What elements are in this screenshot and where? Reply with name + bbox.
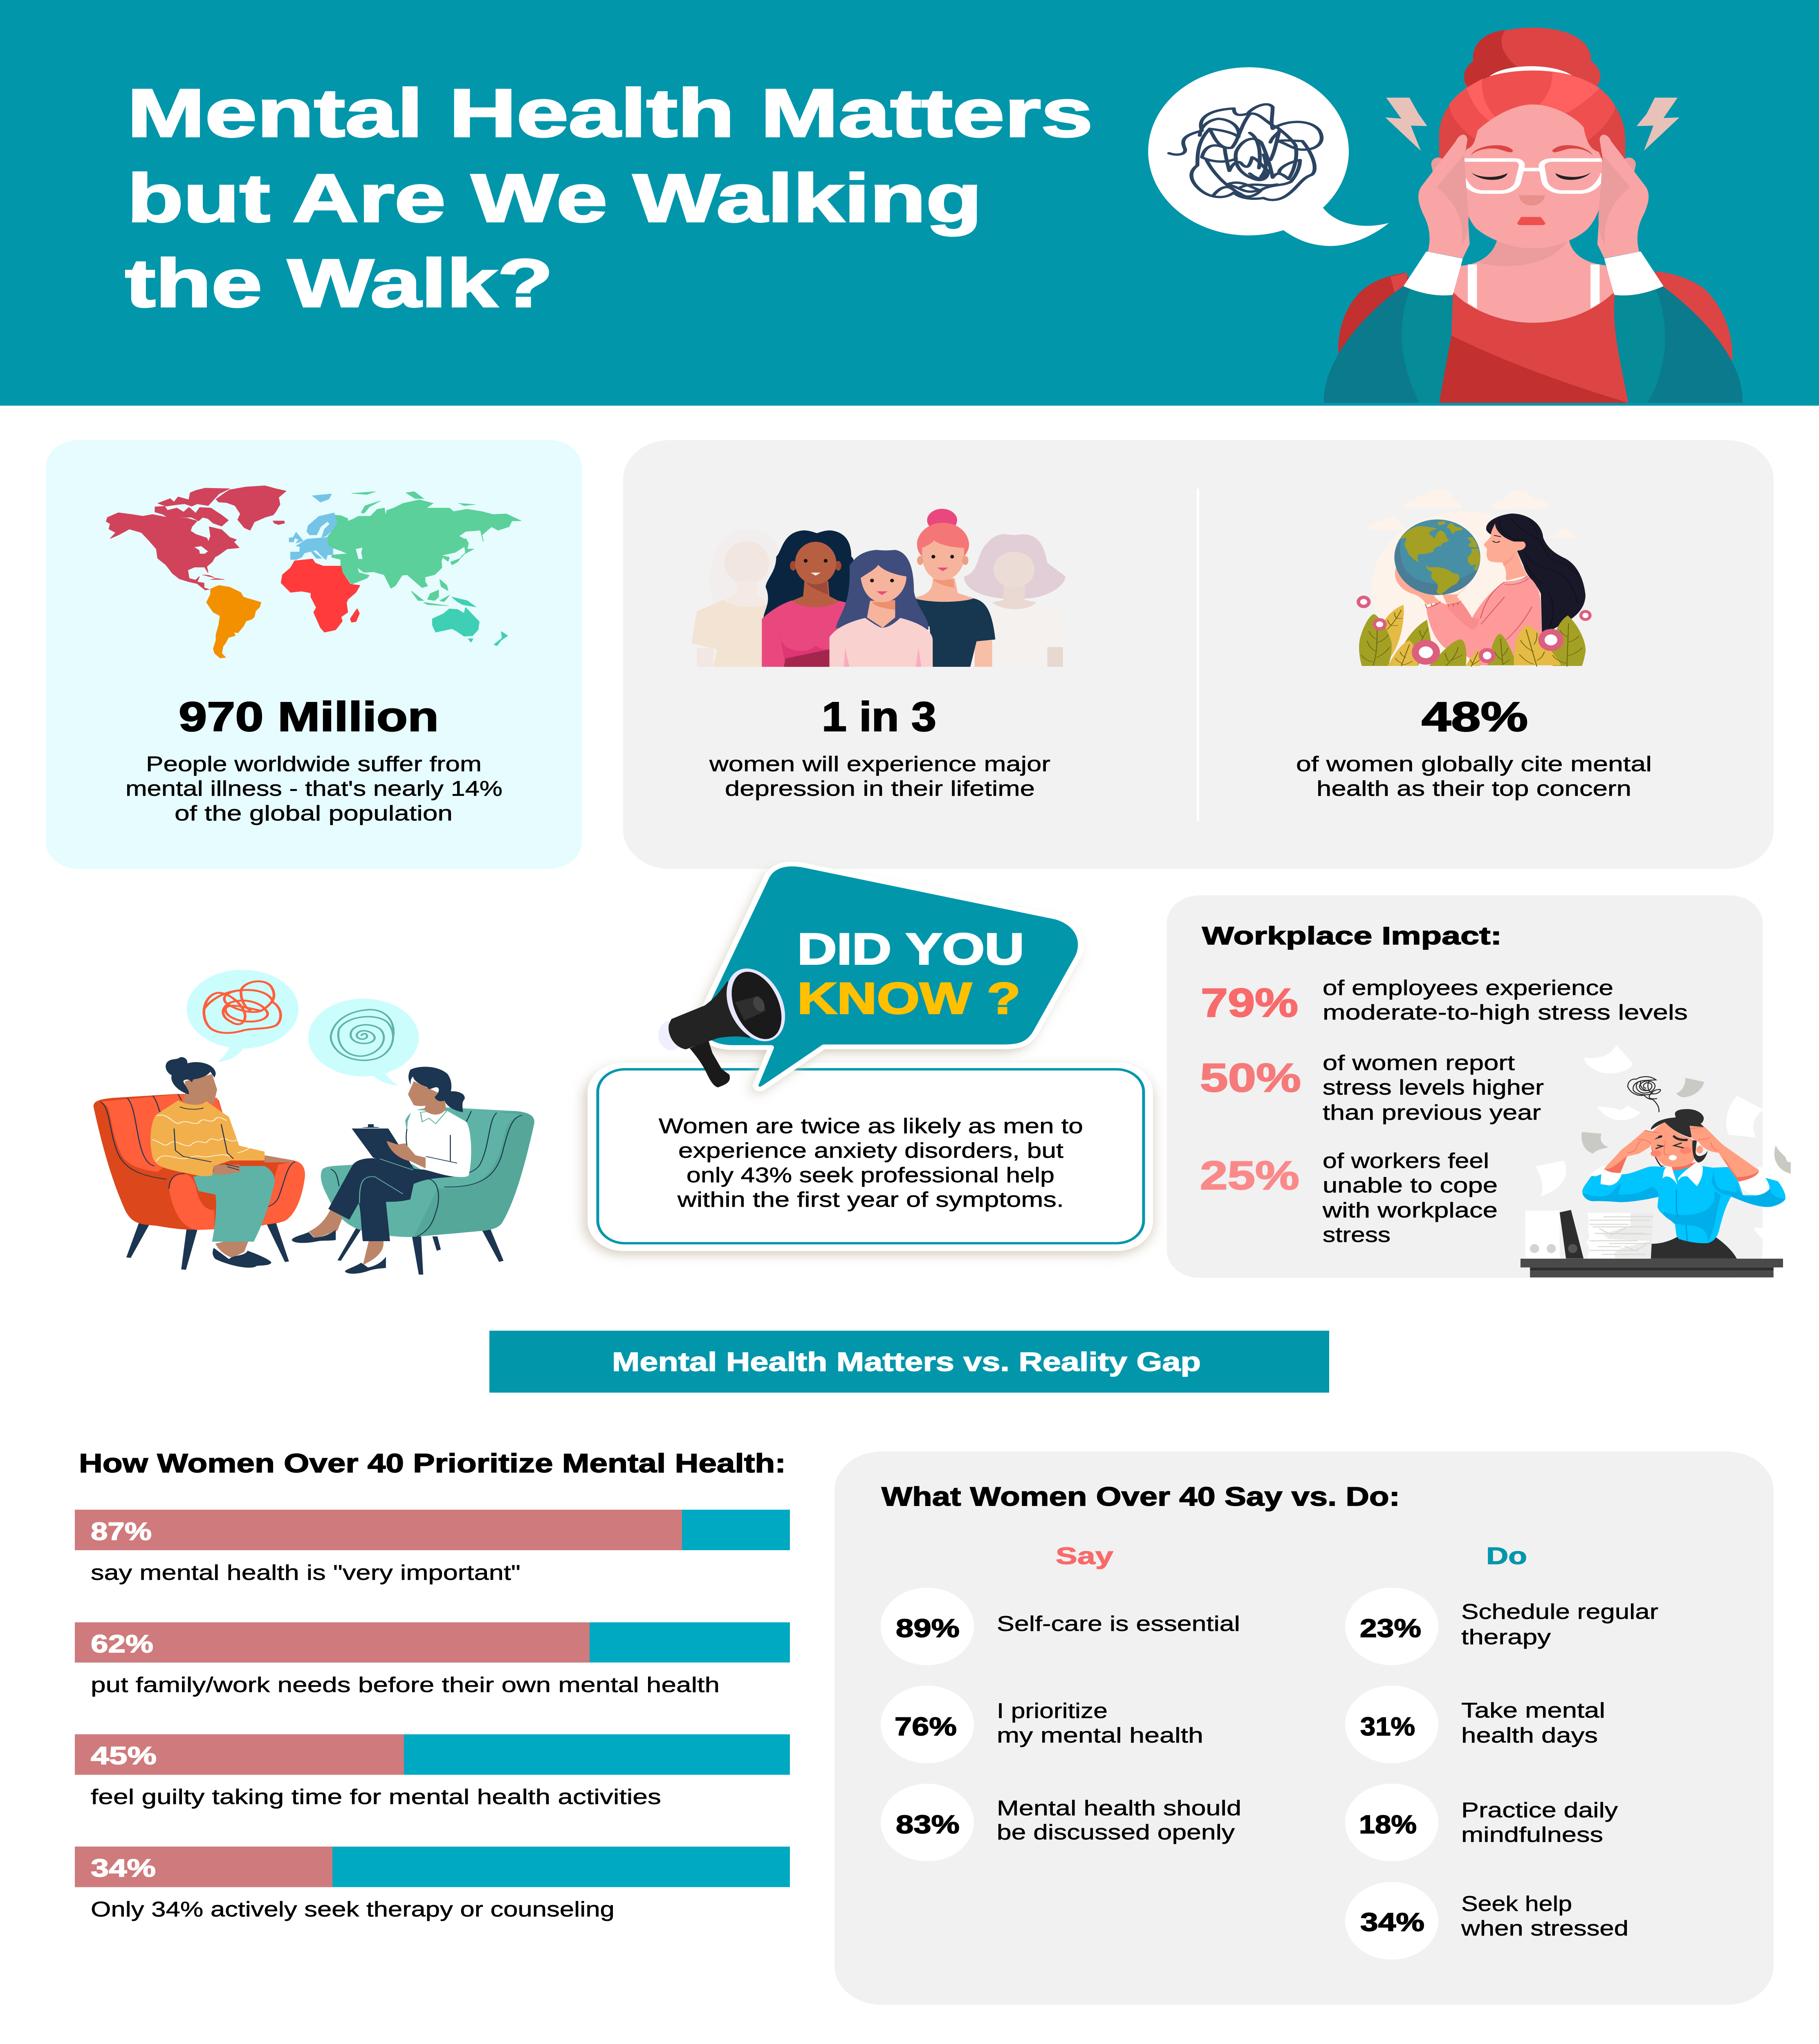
stat: 25% workers [1200, 1149, 1498, 1247]
say item: 76%: I prioritize [997, 1699, 1108, 1723]
figure: woman in pink [762, 530, 856, 667]
stat: 25% workers: of workers feel [1323, 1149, 1489, 1173]
say item: 89%: 89% [896, 1614, 960, 1643]
figure: woman with orange hair [904, 509, 995, 667]
stat: 50% women: stress levels higher [1323, 1076, 1544, 1099]
illustration: group of women [692, 509, 1065, 667]
stat: 25% workers: unable to cope [1323, 1174, 1498, 1197]
figure: face and sweater [1425, 523, 1542, 665]
figure: hair [1439, 28, 1625, 190]
callout text box [584, 1062, 1153, 1255]
section banner: reality gap: Mental Health Matters vs. Reality Gap [612, 1347, 1201, 1377]
icon: paper stack [1587, 1213, 1654, 1258]
stat: 79% employees: 79% [1201, 981, 1298, 1025]
do item: 34%: 34% [1360, 1908, 1424, 1936]
do item: 23%: therapy [1461, 1625, 1551, 1649]
stat: 50% women: 50% [1200, 1056, 1301, 1100]
do item: 18%: Practice daily [1461, 1798, 1618, 1822]
stat: 25% workers: with workplace [1322, 1199, 1498, 1222]
icon: desk [1521, 1259, 1783, 1278]
speech bubble heading [691, 864, 1081, 1094]
bar: 87% [75, 1510, 790, 1585]
do item: 31%: health days [1461, 1724, 1598, 1747]
figure: hands [1395, 567, 1467, 605]
do item: 18% [1345, 1784, 1618, 1861]
bar: 62%: 62% [91, 1630, 153, 1658]
do item: 18%: mindfulness [1461, 1823, 1603, 1847]
title [125, 75, 1093, 321]
stat: 25% workers: stress [1323, 1223, 1391, 1247]
illustration: stressed office worker at desk [1521, 1045, 1791, 1278]
column heading: say: Say [1056, 1543, 1113, 1569]
figure: shoulders, top and cardigan [1324, 240, 1743, 403]
figure: left faded woman [692, 530, 780, 667]
icon: lightning bolts [1385, 98, 1680, 151]
bar: 87%: 87% [91, 1518, 152, 1546]
stat description: mental illness - that's nearly 14% [126, 777, 502, 800]
do item: 18%: 18% [1359, 1810, 1417, 1839]
speech bubble heading: DID YOU [797, 925, 1024, 974]
bar: 62% [75, 1623, 790, 1697]
icon: clouds and backdrop [1366, 489, 1577, 666]
illustration: therapy session [93, 970, 534, 1275]
stat: 970 Million: 970 Million [179, 693, 439, 740]
do item: 23%: 23% [1360, 1614, 1421, 1643]
icon: thought bubble with scribble [1148, 67, 1389, 246]
stat: 79% employees: of employees experience [1323, 976, 1613, 1000]
stat description: People worldwide suffer from [146, 752, 482, 776]
panel: say vs do [834, 1452, 1774, 2005]
bar: 45%: feel guilty taking time for mental health activities [91, 1785, 661, 1809]
stat: 50% women: than previous year [1323, 1101, 1541, 1125]
stat description: depression [709, 752, 1050, 800]
figure: worker with papers and desk [1521, 1077, 1791, 1278]
figure: hands and cuffs [1404, 134, 1664, 296]
bar: 34% [75, 1847, 790, 1921]
bar: 34%: Only 34% actively seek therapy or counseling [91, 1898, 615, 1921]
say item: 89% [881, 1588, 1240, 1665]
figure: therapist on green chair [292, 1067, 534, 1275]
figure: worker arms [1604, 1126, 1759, 1181]
say item: 83%: Mental health should [997, 1796, 1241, 1820]
icon: megaphone [658, 964, 795, 1087]
icon: leaves and flowers [1357, 596, 1592, 667]
say item: 76%: 76% [895, 1712, 957, 1741]
heading: how women prioritize: How Women Over 40 Prioritize Mental Health: [79, 1448, 786, 1478]
say item: 83% [881, 1784, 1241, 1861]
callout text box: experience anxiety disorders, but [678, 1139, 1063, 1163]
callout text box: Women are twice as likely as men to [659, 1114, 1083, 1138]
figure: worker head [1651, 1109, 1708, 1167]
stat description [126, 752, 502, 825]
say item: 83%: 83% [896, 1810, 960, 1839]
say item: 76% [881, 1685, 1203, 1763]
title: the Walk? [125, 245, 553, 321]
figure: client on orange chair [93, 1057, 305, 1270]
header banner [0, 0, 1819, 406]
say item: 83%: be discussed openly [997, 1821, 1235, 1844]
stat description: top concern: of women globally cite mental [1296, 752, 1652, 776]
callout text box: only 43% seek professional help [686, 1163, 1054, 1187]
icon: world map [106, 486, 521, 658]
title: Mental Health Matters [127, 75, 1093, 151]
callout text box: within the first year of symptoms. [677, 1188, 1064, 1212]
title: but Are We Walking [127, 160, 982, 236]
stat: 50% women: of women report [1323, 1051, 1515, 1075]
stat: 1 in 3: 1 in 3 [822, 693, 936, 740]
do item: 31%: Take mental [1461, 1699, 1605, 1722]
icon: speech bubbles with scribbles [186, 970, 419, 1085]
illustration: woman holding globe [1357, 489, 1592, 667]
stat description: depression: women will experience major [709, 752, 1050, 776]
say item: 76%: my mental health [997, 1724, 1203, 1747]
icon: globe [1395, 520, 1480, 595]
panel: 1 in 3 and 48% [623, 440, 1774, 869]
panel: workplace impact [1167, 895, 1791, 1278]
bar: 34%: 34% [91, 1854, 156, 1882]
stat: 50% women [1200, 1051, 1544, 1125]
do item: 23%: Schedule regular [1461, 1600, 1658, 1624]
bar: 45% [75, 1734, 790, 1809]
figure: right faded woman [964, 534, 1065, 667]
callout: did you know [584, 864, 1153, 1255]
stat: 25% workers: 25% [1200, 1153, 1299, 1198]
do item: 23% [1345, 1588, 1658, 1665]
say item: 89%: Self-care is essential [997, 1612, 1240, 1636]
icon: stress scribble [1628, 1077, 1660, 1112]
bar: 62%: put family/work needs before their own mental health [91, 1673, 720, 1697]
stat description: top concern: health as their top concern [1317, 777, 1631, 800]
illustration: stressed woman with glasses and thought bubble [1148, 28, 1743, 403]
speech bubble heading: KNOW ? [797, 974, 1021, 1023]
panel: how women prioritize [75, 1448, 790, 1921]
do item: 34%: when stressed [1461, 1916, 1628, 1940]
stat description: of the global population [175, 802, 453, 825]
icon: flying papers [1581, 1078, 1791, 1238]
column heading: do: Do [1486, 1543, 1527, 1569]
figure: face [1460, 104, 1606, 248]
icon: binders and large papers [1525, 1045, 1633, 1259]
figure: worker body [1582, 1162, 1785, 1259]
bar: 87%: say mental health is "very important" [91, 1561, 520, 1585]
figure: woman with blue hair [830, 550, 933, 667]
section banner: reality gap [489, 1331, 1329, 1393]
stat: 79% employees [1201, 976, 1688, 1025]
heading: workplace impact: Workplace Impact: [1202, 922, 1502, 950]
do item: 31%: 31% [1360, 1712, 1415, 1741]
figure: hair [1486, 513, 1586, 635]
do item: 34%: Seek help [1461, 1892, 1572, 1916]
do item: 34% [1345, 1882, 1628, 1960]
stat: 48%: 48% [1422, 693, 1528, 740]
stat description: top concern [1296, 752, 1652, 800]
stat description: depression: depression in their lifetime [725, 777, 1035, 800]
bar: 45%: 45% [91, 1742, 157, 1770]
do item: 31% [1345, 1685, 1605, 1763]
stat: 79% employees: moderate-to-high stress levels [1323, 1001, 1688, 1024]
panel: 970 Million [46, 440, 582, 869]
heading: say vs do: What Women Over 40 Say vs. Do: [881, 1482, 1400, 1511]
